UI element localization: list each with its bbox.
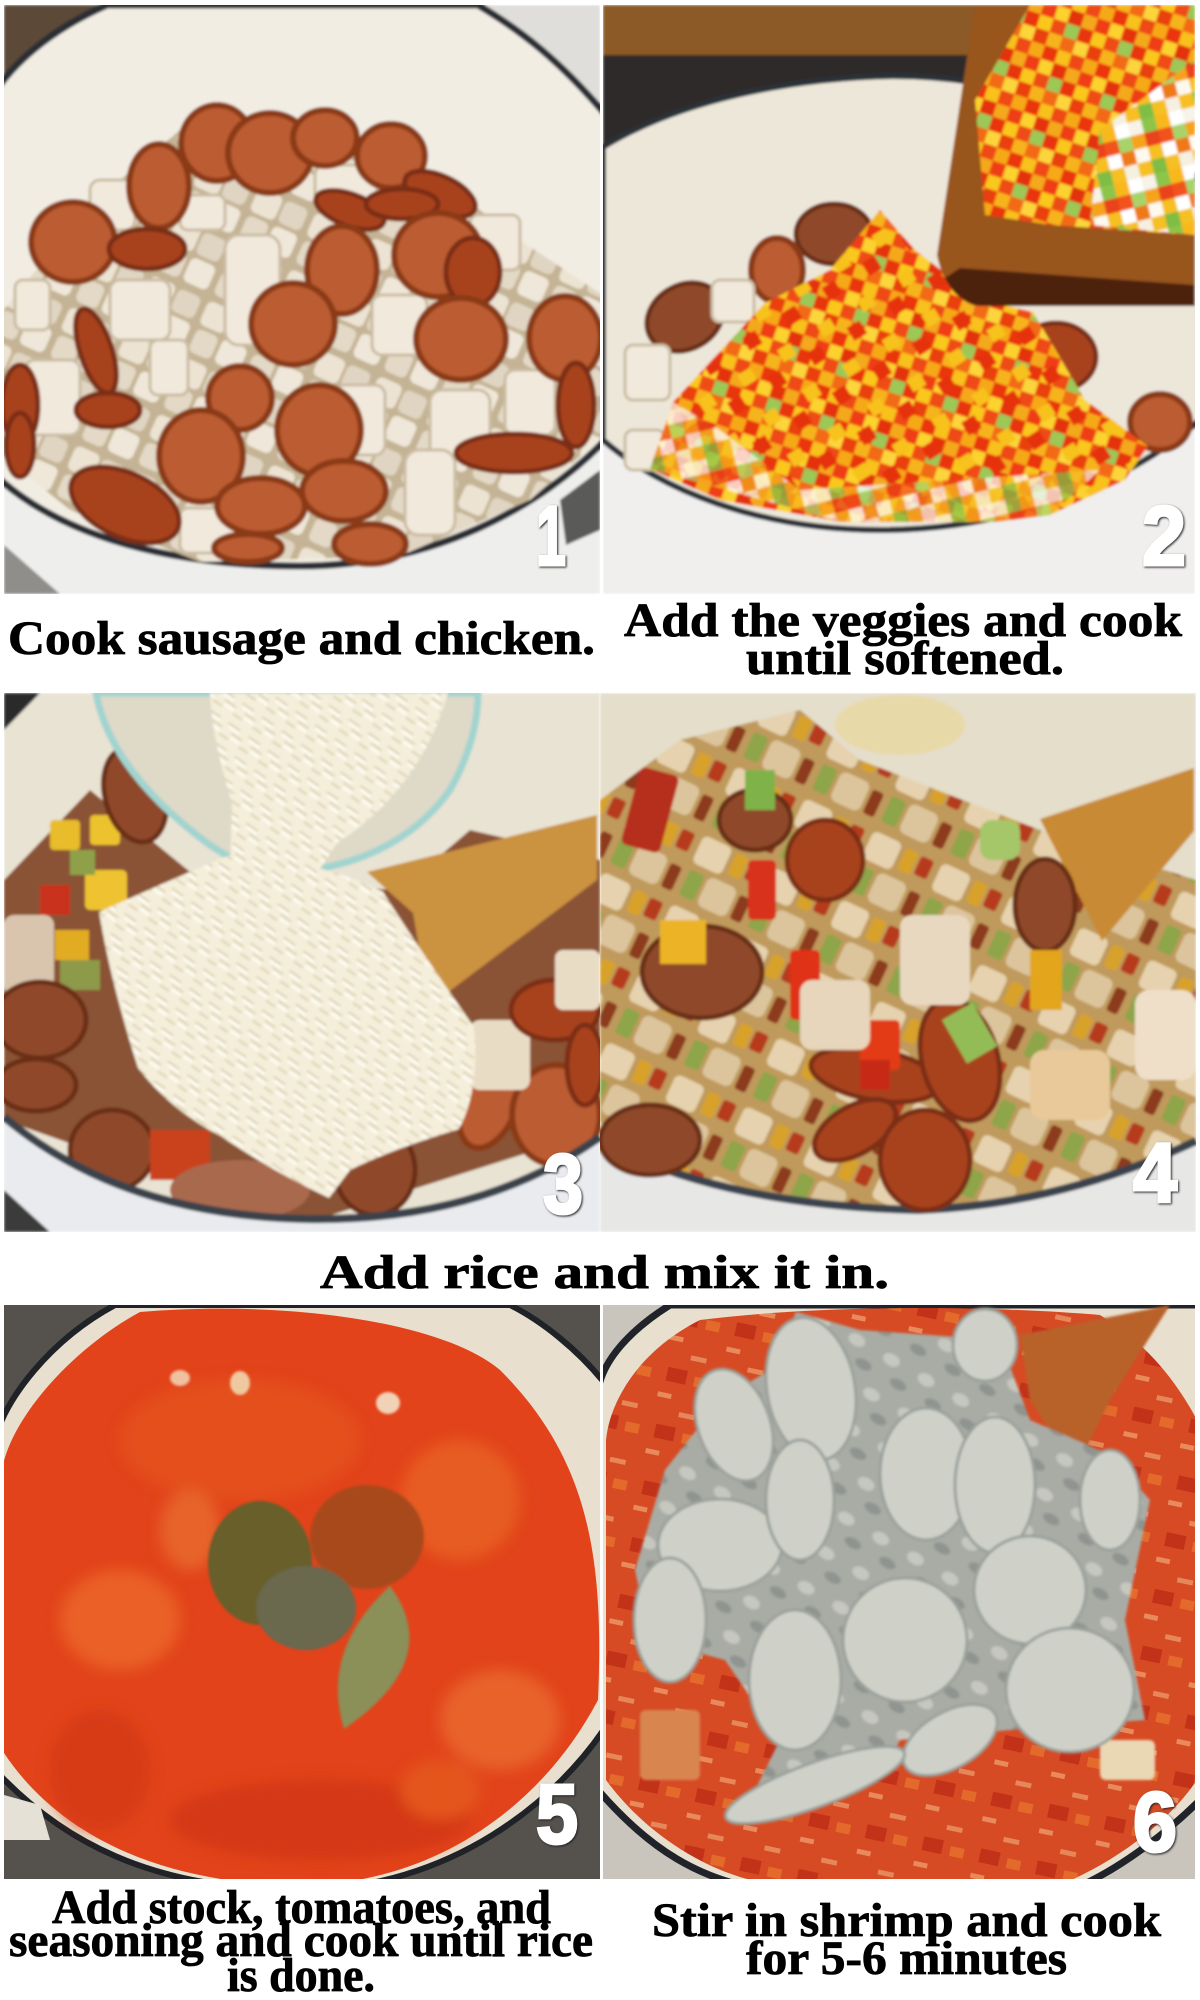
spice: pepper [256, 1566, 356, 1650]
shrimp cluster [635, 1312, 1150, 1820]
pale rice at top of pot [835, 695, 965, 755]
chicken chunks [640, 1710, 700, 1780]
panel: step 3 adding rice photo [0, 693, 603, 1232]
panel: step 6 shrimp photo [598, 1305, 1200, 1890]
panel: step 2 adding veggies photo [603, 5, 1200, 594]
rice stream [208, 693, 449, 870]
wooden spoon [1040, 768, 1194, 941]
caption: step 6: for 5-6 minutes [746, 1932, 1067, 1985]
wooden spoon [367, 815, 597, 1010]
chicken pieces [900, 915, 970, 1005]
spice: paprika [310, 1485, 424, 1589]
pot exterior bottom [4, 1117, 600, 1232]
food mixture [600, 710, 1196, 1210]
number 6: 6 [1133, 1775, 1177, 1869]
pot handle [4, 1795, 50, 1840]
chicken base [0, 130, 610, 562]
pot interior with rim [0, 5, 610, 566]
caption: step 2: until softened. [746, 632, 1064, 685]
caption: step 1: Cook sausage and chicken. [8, 612, 595, 665]
bay leaf [338, 1586, 409, 1729]
veggies on board [975, 5, 1195, 235]
panel: step 5 stock and seasoning photo [0, 1305, 610, 1890]
food mixture under rice [4, 790, 600, 1225]
pot rim [0, 1305, 610, 1890]
wooden spoon [1020, 1305, 1170, 1470]
number 1: 1 [536, 489, 566, 583]
number 3: 3 [543, 1137, 583, 1231]
sausage and chicken under veggies [642, 278, 724, 356]
caption: step 2: Add the veggies and cook [624, 594, 1182, 647]
caption: step 5 [9, 1881, 593, 2000]
rice pile [99, 855, 475, 1198]
caption: step 2 [624, 594, 1182, 685]
caption: steps 3 and 4: Add rice and mix it in. [320, 1246, 889, 1299]
cutting board [937, 5, 1195, 306]
caption: step 6 [652, 1894, 1161, 1985]
pot and stew [598, 1305, 1200, 1890]
sausages and peppers [600, 766, 1075, 1210]
tomato stew [2, 1309, 599, 1885]
spice: oregano [208, 1501, 312, 1625]
veggie heap [650, 210, 1148, 522]
caption: step 5: seasoning and cook until rice [9, 1914, 593, 1967]
sausage slices [2, 105, 601, 564]
chicken chunks [15, 165, 555, 553]
number 5: 5 [536, 1767, 578, 1861]
panel: step 1 sausage and chicken photo [0, 5, 610, 594]
pot exterior bottom [600, 1141, 1196, 1232]
measuring cup [96, 693, 478, 873]
number 4: 4 [1133, 1126, 1177, 1220]
caption: step 5: Add stock, tomatoes, and [52, 1881, 551, 1934]
caption: step 6: Stir in shrimp and cook [652, 1894, 1161, 1947]
number 2: 2 [1142, 489, 1186, 583]
panel: step 4 mixed rice photo [600, 693, 1196, 1232]
pot interior with rim [603, 76, 1200, 530]
